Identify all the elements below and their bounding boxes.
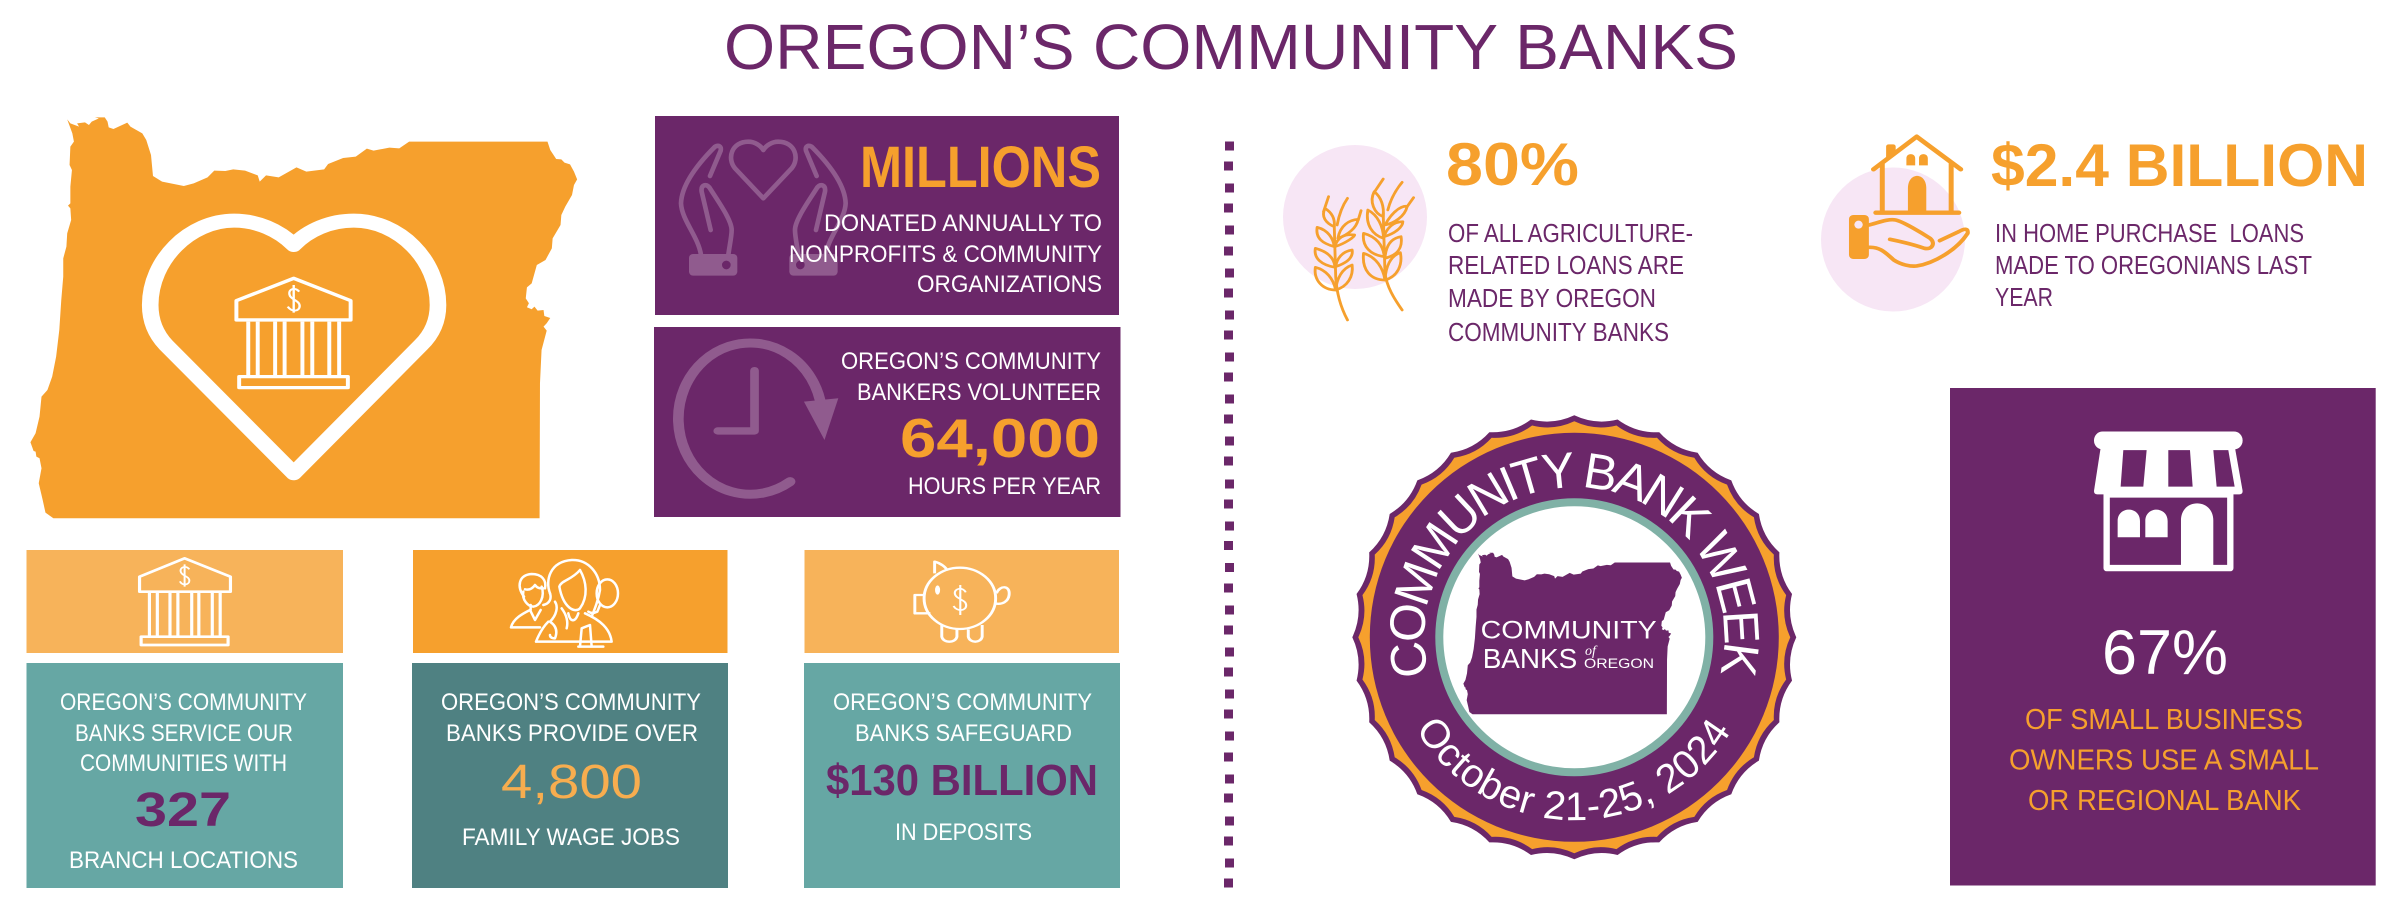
text: deposits intro: OREGON’S COMMUNITY xyxy=(833,689,1092,716)
icon: storefront xyxy=(2094,432,2243,568)
scalloped outer edge xyxy=(1352,415,1796,859)
text: branch intro: COMMUNITIES WITH xyxy=(80,750,287,777)
stat: 327: 327 xyxy=(135,784,231,837)
text: home purchase loans: MADE TO OREGONIANS LAST xyxy=(1995,252,2312,280)
panel: branch locations xyxy=(26,550,343,888)
icon: bank xyxy=(140,558,230,645)
text: volunteer intro: OREGON’S COMMUNITY xyxy=(841,348,1101,375)
orange scallop xyxy=(1358,421,1790,853)
panel: family wage jobs xyxy=(412,550,728,888)
stat: 80%: 80% xyxy=(1446,131,1579,198)
pink circle xyxy=(1283,145,1427,289)
text: jobs intro: OREGON’S COMMUNITY xyxy=(441,689,701,716)
icon: people xyxy=(511,560,618,647)
panel: volunteer hours xyxy=(654,327,1120,517)
text: small business owners: OR REGIONAL BANK xyxy=(2028,785,2302,817)
stat: 64,000: 64,000 xyxy=(900,407,1100,469)
text: donated annually: DONATED ANNUALLY TO xyxy=(824,210,1102,237)
title: OREGON’S COMMUNITY BANKS xyxy=(724,11,1738,83)
icon: house in hand xyxy=(1849,137,1968,266)
logo wordmark: OREGON xyxy=(1584,655,1654,671)
text: agriculture loans: COMMUNITY BANKS xyxy=(1448,319,1669,347)
text: home purchase loans: IN HOME PURCHASE LOANS xyxy=(1995,220,2304,248)
text: branch intro: OREGON’S COMMUNITY xyxy=(60,689,307,716)
text: family wage jobs: FAMILY WAGE JOBS xyxy=(462,824,680,851)
text: donated annually xyxy=(789,210,1102,298)
text: small business owners: OF SMALL BUSINESS xyxy=(2025,704,2303,736)
text: donated annually: NONPROFITS & COMMUNITY xyxy=(789,241,1102,268)
text: home purchase loans: YEAR xyxy=(1995,284,2053,312)
small Oregon map xyxy=(1463,553,1682,714)
text: jobs intro: BANKS PROVIDE OVER xyxy=(446,720,698,747)
Oregon map with heart and bank xyxy=(30,117,577,518)
text: agriculture loans: MADE BY OREGON xyxy=(1448,285,1656,313)
pink circle xyxy=(1821,168,1965,312)
text: volunteer intro xyxy=(841,348,1101,406)
text: hours per year: HOURS PER YEAR xyxy=(908,473,1101,500)
purple disc xyxy=(1370,433,1779,842)
map silhouette xyxy=(30,117,577,518)
logo wordmark: of xyxy=(1585,644,1598,659)
curved heading: COMMUNITY BANK WEEK xyxy=(1390,452,1760,676)
text: agriculture loans: RELATED LOANS ARE xyxy=(1448,252,1684,280)
panel: deposits xyxy=(804,550,1120,888)
stat block: home purchase loans xyxy=(1821,132,2368,312)
text: in deposits: IN DEPOSITS xyxy=(895,819,1032,846)
text: branch intro: BANKS SERVICE OUR xyxy=(75,720,293,747)
text: agriculture loans xyxy=(1448,220,1693,347)
logo wordmark: BANKS xyxy=(1483,643,1577,674)
stat block: agriculture loans xyxy=(1283,131,1693,347)
icon: piggy bank xyxy=(915,562,1009,642)
teal ring xyxy=(1439,502,1709,772)
text: branch intro xyxy=(60,689,307,777)
text: donated annually: ORGANIZATIONS xyxy=(917,271,1102,298)
stat: $130 billion: $130 BILLION xyxy=(826,756,1098,805)
text: branch locations: BRANCH LOCATIONS xyxy=(69,847,298,874)
logo wordmark xyxy=(1481,616,1657,674)
icon: clock with arrow xyxy=(678,343,838,494)
stat: millions: MILLIONS xyxy=(860,135,1101,200)
text: small business owners xyxy=(2009,704,2319,817)
text: deposits intro xyxy=(833,689,1092,747)
logo wordmark: COMMUNITY xyxy=(1481,616,1657,644)
panel: small business xyxy=(1950,388,2376,886)
curved date: October 21-25, 2024 xyxy=(1420,720,1729,820)
panel: millions donated xyxy=(655,116,1119,315)
icon: hands holding heart xyxy=(681,142,846,276)
badge: community bank week seal xyxy=(1352,415,1796,860)
icon: wheat xyxy=(1315,179,1414,320)
text: home purchase loans xyxy=(1995,220,2312,312)
stat: 4,800: 4,800 xyxy=(501,756,642,809)
stat: 67%: 67% xyxy=(2102,618,2228,688)
heart outline xyxy=(150,221,438,473)
text: small business owners: OWNERS USE A SMALL xyxy=(2009,744,2319,776)
text: volunteer intro: BANKERS VOLUNTEER xyxy=(857,379,1101,406)
stat: $2.4 billion: $2.4 BILLION xyxy=(1991,132,2368,199)
text: agriculture loans: OF ALL AGRICULTURE- xyxy=(1448,220,1693,248)
bank icon xyxy=(236,278,351,388)
text: jobs intro xyxy=(441,689,701,747)
text: deposits intro: BANKS SAFEGUARD xyxy=(855,720,1072,747)
